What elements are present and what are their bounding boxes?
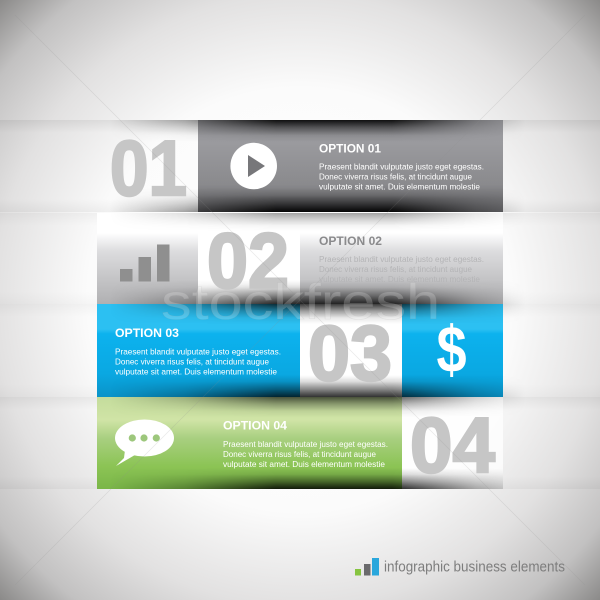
panel: row 3 [97,304,503,397]
text block: option 03: Donec viverra risus felis, at tincidunt augue [115,356,269,366]
text block: option 03 [115,326,281,376]
footer logo bars [355,558,379,576]
text block: option 02: Praesent blandit vulputate justo eget egestas. [319,254,484,264]
panel: row 2 [97,213,503,304]
text block: option 04: Donec viverra risus felis, at tincidunt augue [223,449,376,459]
footer caption: infographic business elements [384,558,565,576]
watermark: stockfresh [161,274,440,330]
fold shadows [118,120,518,489]
text block: option 03: Praesent blandit vulputate justo eget egestas. [115,346,281,356]
number 02: 02 [207,216,289,304]
text block: option 01: OPTION 01 [319,142,381,156]
text block: option 02: Donec viverra risus felis, at tincidunt augue [319,264,472,274]
text block: option 04: OPTION 04 [223,418,287,432]
icon: speech bubble [115,420,174,466]
text block: option 01: Praesent blandit vulputate justo eget egestas. [319,162,484,172]
text block: option 02: OPTION 02 [319,234,382,248]
text block: option 03: vulputate sit amet. Duis elementum molestie [115,366,277,376]
panel: row 4 [97,397,503,489]
number 03: 03 [308,309,392,397]
number 04: 04 [410,401,495,489]
text block: option 04: Praesent blandit vulputate justo eget egestas. [223,439,388,449]
text block: option 03: OPTION 03 [115,326,179,340]
text block: option 01: vulputate sit amet. Duis elementum molestie [319,182,480,192]
text block: option 01: Donec viverra risus felis, at tincidunt augue [319,172,472,182]
text block: option 01 [319,142,484,192]
text block: option 04 [223,418,388,469]
text block: option 02 [319,234,484,284]
number 01: 01 [110,124,187,212]
icon: play button [230,143,277,189]
panel: row 1 [198,120,503,212]
text block: option 04: vulputate sit amet. Duis elementum molestie [223,459,385,469]
text block: option 02: vulputate sit amet. Duis elementum molestie [319,274,480,284]
side slit shading [0,120,600,489]
icon: bar chart [120,244,170,282]
icon: dollar sign: $ [436,312,467,386]
